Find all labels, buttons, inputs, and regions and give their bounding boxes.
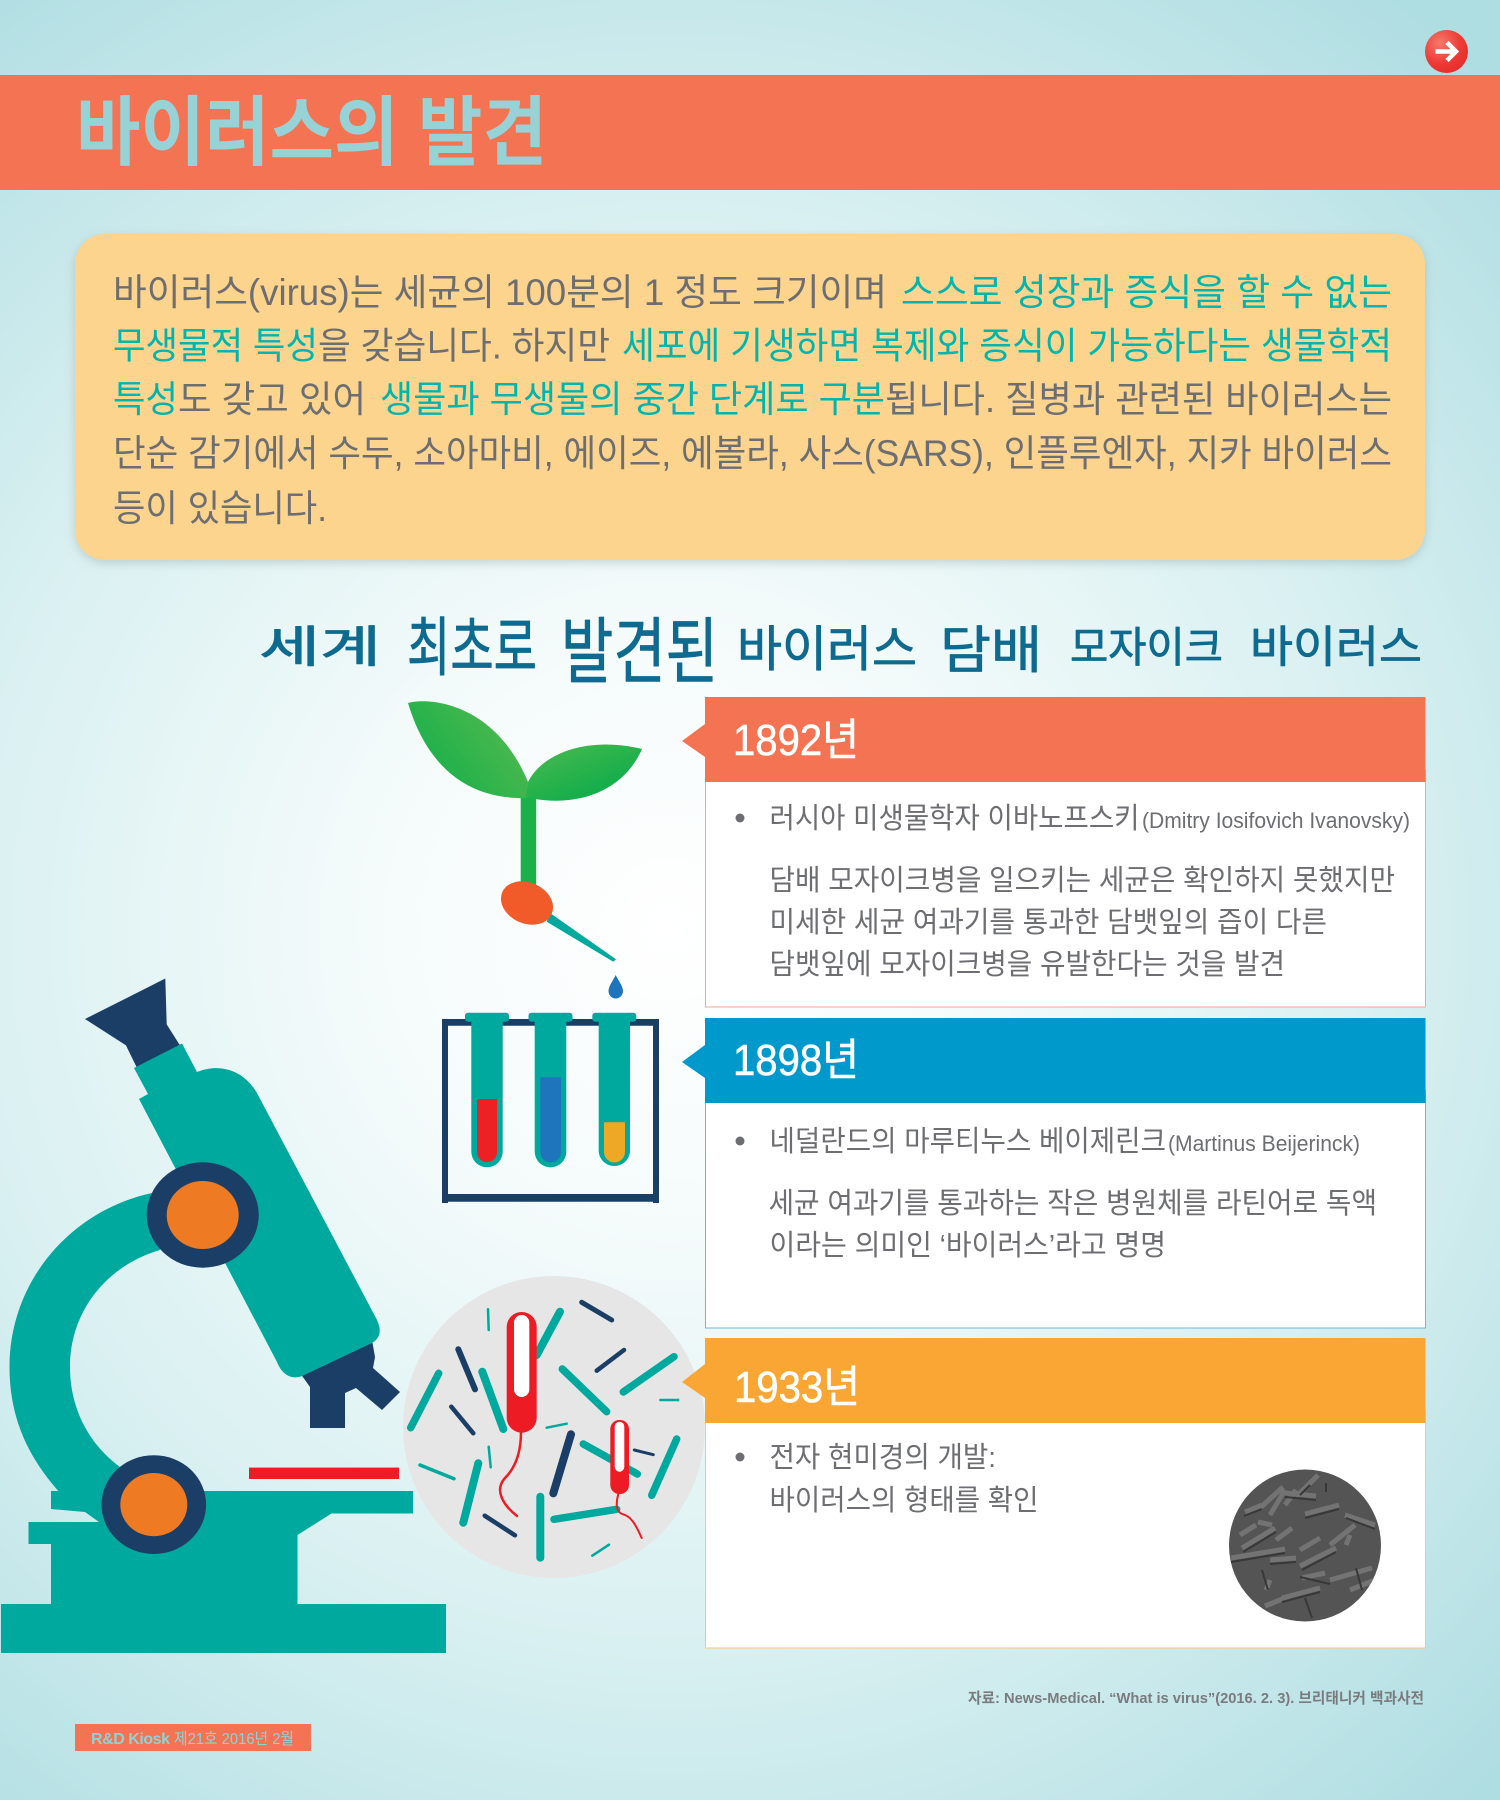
description: 미세한 세균 여과기를 통과한 담뱃잎의 즙이 다른	[770, 907, 1327, 939]
card body	[706, 770, 1426, 1007]
panel: 1933	[682, 1338, 1426, 1648]
discoverer name: (Martinus Beijerinck)	[1168, 1131, 1360, 1156]
arm	[10, 1193, 160, 1495]
bullet	[736, 1136, 744, 1146]
illustration: microscope	[1, 978, 446, 1653]
year label: 1898년	[733, 1036, 859, 1085]
upper focus knob	[147, 1162, 259, 1268]
stem	[521, 790, 536, 890]
issue badge: R&D Kiosk	[91, 1731, 170, 1748]
right leaf	[526, 744, 642, 801]
intro line 2: 을 갖습니다. 하지만	[318, 326, 610, 366]
description: 바이러스의 형태를 확인	[770, 1484, 1038, 1517]
intro line 2: 세포에 기생하면 복제와 증식이 가능하다는 생물학적	[622, 326, 1392, 366]
rack frame	[442, 1019, 659, 1203]
description	[770, 1442, 1038, 1517]
description: 전자 현미경의 개발:	[770, 1442, 996, 1474]
description: 이라는 의미인 ‘바이러스’라고 명명	[770, 1230, 1166, 1262]
tube 2 blue	[528, 1013, 572, 1167]
nosepiece	[300, 1340, 400, 1428]
handwritten subtitle: 바이러스	[737, 623, 917, 677]
teal and navy rods	[411, 1309, 679, 1558]
intro line 3: 도 갖고 있어	[178, 379, 366, 420]
intro line 1: 바이러스(virus)는 세균의 100분의 1 정도 크기이며	[113, 272, 887, 313]
card body	[706, 1410, 1426, 1648]
year label: 1933년	[734, 1363, 860, 1412]
large bacterium	[500, 1312, 537, 1516]
handwritten subtitle: 발견된	[561, 613, 718, 693]
icon: water drop	[608, 975, 623, 998]
source note: 자료: News-Medical. “What is virus”(2016. 2. 3). 브리태니커 백과사전	[968, 1690, 1424, 1707]
handwritten subtitle: 세계	[259, 623, 381, 672]
intro line 2: 무생물적 특성	[113, 326, 318, 366]
handwritten subtitle: 담배	[940, 622, 1042, 679]
intro line 5: 등이 있습니다.	[113, 488, 327, 529]
dropper bulb	[494, 873, 560, 933]
description	[770, 864, 1395, 981]
discoverer name: (Dmitry Iosifovich Ivanovsky)	[1142, 808, 1410, 833]
intro line 3: 생물과 무생물의 중간 단계로 구분	[380, 379, 885, 420]
illustration: sprout and dropper	[408, 701, 642, 998]
lower focus knob	[102, 1455, 206, 1554]
handwritten subtitle	[259, 612, 1422, 693]
intro line 3: 특성	[113, 379, 178, 420]
illustration: magnified bacteria circle	[403, 1276, 705, 1578]
icon: next arrow button	[1425, 30, 1468, 73]
discoverer name: 러시아 미생물학자 이바노프스키	[770, 802, 1140, 835]
intro line 3: 됩니다. 질병과 관련된 바이러스는	[885, 379, 1392, 420]
discoverer name: 네덜란드의 마루티누스 베이제린크	[770, 1126, 1166, 1158]
description: 세균 여과기를 통과하는 작은 병원체를 라틴어로 독액	[768, 1187, 1377, 1220]
intro line 2	[113, 326, 1392, 366]
small bacterium	[610, 1420, 642, 1538]
issue badge: 제21호 2016년 2월	[174, 1730, 294, 1748]
electron micrograph	[1228, 1469, 1382, 1622]
issue badge	[75, 1724, 311, 1751]
intro line 1	[113, 272, 1392, 313]
bullet	[736, 1452, 744, 1462]
tube 1 red	[465, 1013, 509, 1167]
description: 담뱃잎에 모자이크병을 유발한다는 것을 발견	[770, 949, 1285, 981]
year header	[682, 697, 1426, 782]
slide	[249, 1468, 399, 1479]
body tube	[134, 1044, 380, 1377]
intro line 1: 스스로 성장과 증식을 할 수 없는	[901, 272, 1392, 313]
illustration: test tube rack	[442, 1013, 659, 1203]
tube 3 amber	[592, 1013, 636, 1166]
base and stage	[1, 1491, 446, 1653]
panel: 1892	[682, 697, 1426, 1007]
panel: 1898	[682, 1018, 1426, 1328]
handwritten subtitle: 바이러스	[1250, 623, 1422, 672]
year header	[682, 1338, 1426, 1423]
handwritten subtitle: 모자이크	[1070, 624, 1223, 671]
left leaf	[408, 701, 528, 798]
intro line 3	[113, 379, 1392, 420]
card body	[706, 1090, 1426, 1328]
year header	[682, 1018, 1426, 1103]
title banner	[0, 75, 1500, 190]
description	[768, 1187, 1377, 1262]
title: 바이러스의 발견	[76, 91, 547, 176]
handwritten subtitle: 최초로	[407, 612, 537, 684]
bullet	[736, 814, 744, 822]
year label: 1892년	[733, 716, 859, 765]
description: 담배 모자이크병을 일으키는 세균은 확인하지 못했지만	[770, 864, 1395, 897]
intro line 4: 단순 감기에서 수두, 소아마비, 에이즈, 에볼라, 사스(SARS), 인플루엔자, 지카 바이러스	[113, 433, 1392, 474]
discoverer name	[770, 802, 1410, 835]
dropper tip	[547, 913, 616, 962]
panel: introduction	[75, 234, 1425, 560]
eyepiece	[85, 978, 181, 1070]
